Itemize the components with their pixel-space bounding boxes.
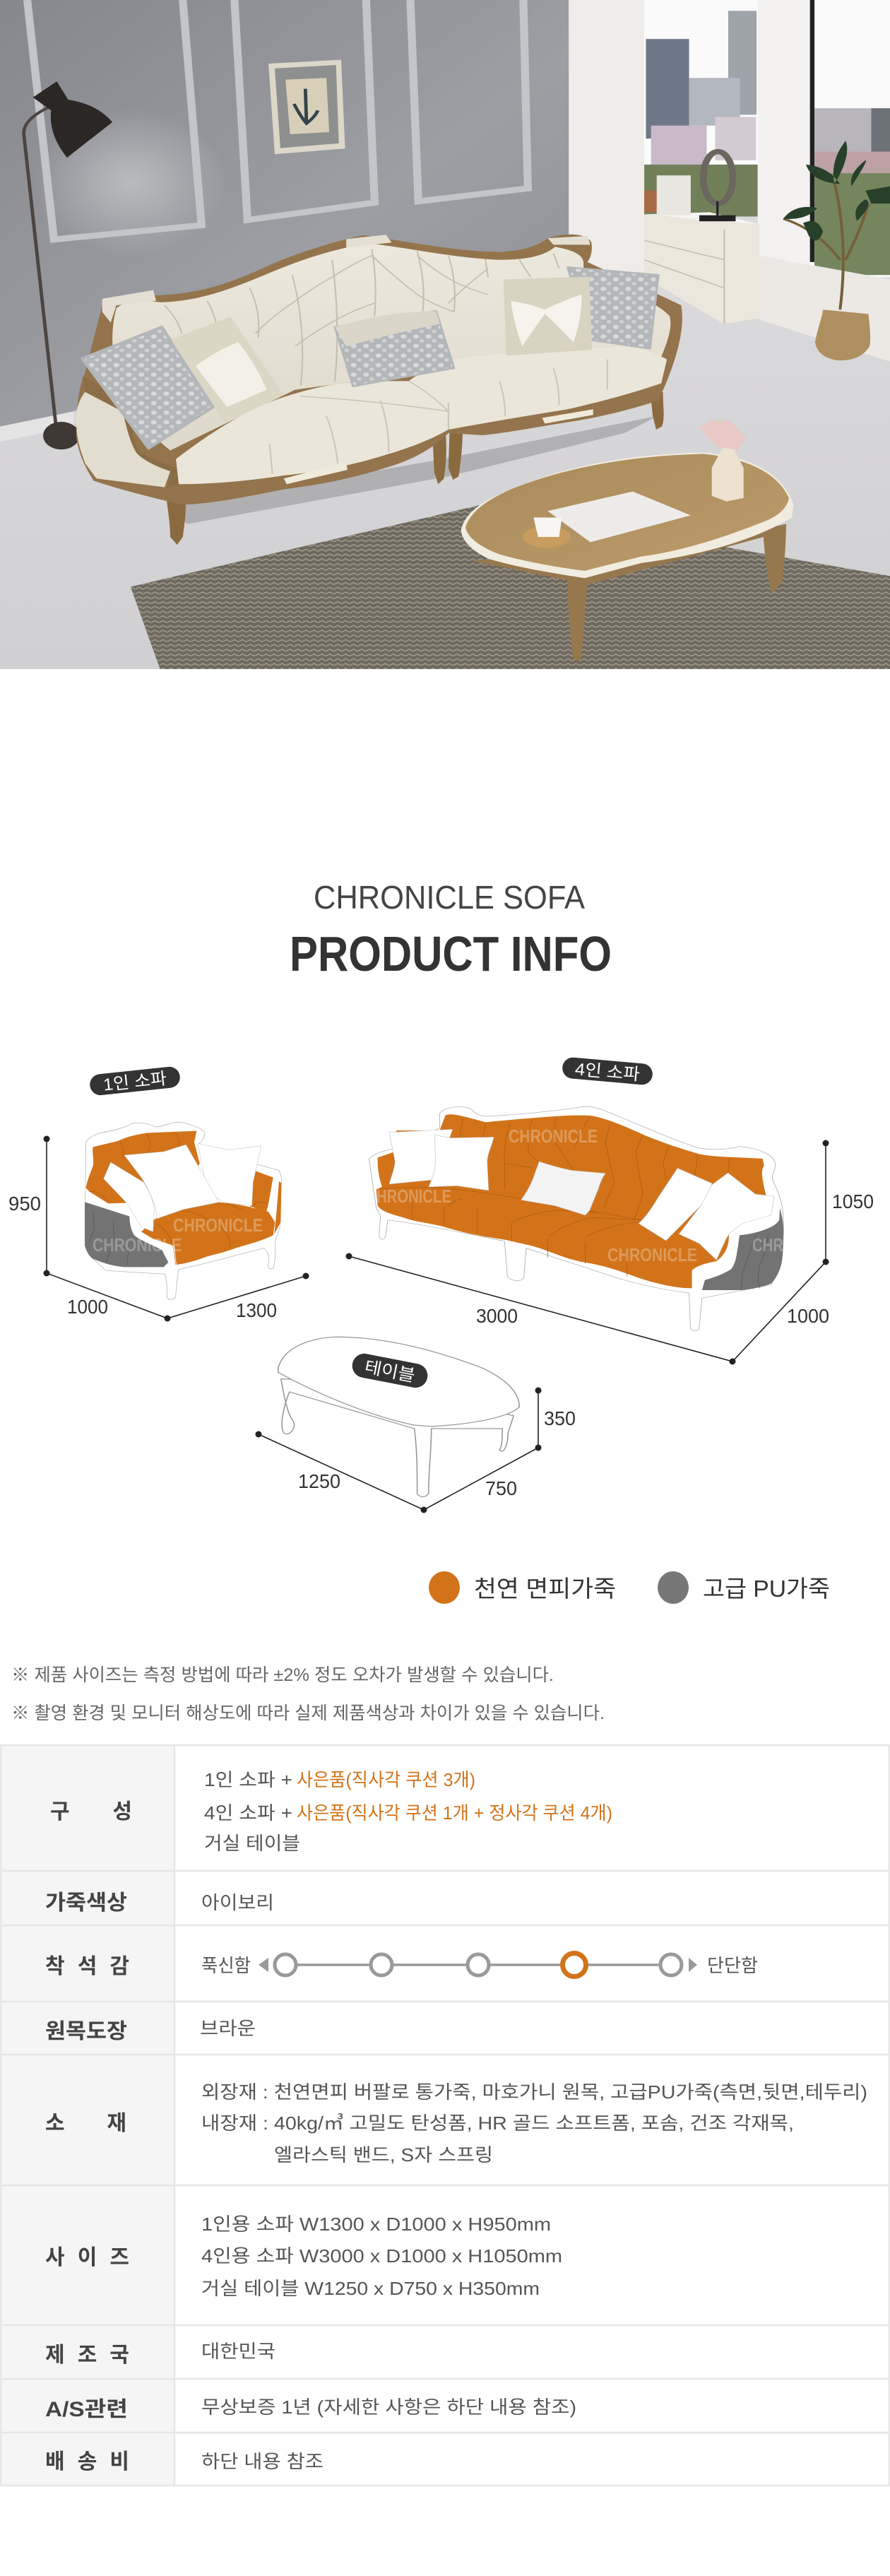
- wood silhouette: [76, 235, 682, 504]
- legend: PU leather: 고급 PU가죽: [703, 1576, 830, 1602]
- sofa frame: [369, 1106, 783, 1331]
- watermarks on upholstery: CHRONICLE: [173, 1215, 263, 1236]
- books and ring sculpture: [657, 152, 735, 221]
- row: 제조국: 대한민국: [201, 2341, 275, 2362]
- four-seat sofa drawing: [369, 1106, 784, 1331]
- sofa grey side: [702, 1208, 783, 1290]
- row: 소재: 내장재 : 40kg/㎥ 고밀도 탄성폼, HR 골드 소프트폼, 포솜, 건조 각재목,: [201, 2113, 794, 2134]
- watermarks on upholstery: CHR: [752, 1234, 783, 1255]
- row: 사이즈: 사 이 즈: [45, 2246, 129, 2269]
- row: 소재: [45, 2081, 867, 2166]
- row: 제조국: 제 조 국: [45, 2344, 129, 2367]
- table drawing: [277, 1337, 520, 1498]
- seat cushions: [176, 346, 667, 484]
- dimension numbers: 3000: [476, 1305, 518, 1327]
- cushion: paisley left: [83, 327, 213, 448]
- right lower wall: [759, 256, 890, 362]
- chair right arm: [249, 1171, 273, 1213]
- row: 구성: 사은품(직사각 쿠션 1개 + 정사각 쿠션 4개): [297, 1802, 612, 1824]
- coffee table: [461, 420, 793, 663]
- tag: 테이블: [350, 1352, 429, 1390]
- row: 제조국: [45, 2341, 275, 2367]
- spec table: [0, 1745, 890, 2486]
- skirting board: [0, 411, 73, 442]
- rug: [131, 504, 890, 669]
- sofa cushions: [389, 1129, 453, 1184]
- sofa tufting lines: [379, 1118, 730, 1277]
- tag: 4인 소파: [562, 1056, 653, 1086]
- dimension numbers: 1250: [298, 1470, 340, 1492]
- row: 배송비: 배 송 비: [45, 2450, 129, 2474]
- chair back: [86, 1131, 200, 1203]
- subtitle: CHRONICLE SOFA: CHRONICLE SOFA: [314, 879, 585, 916]
- row: 사이즈: 4인용 소파 W3000 x D1000 x H1050mm: [201, 2245, 562, 2267]
- white wall beside window: [569, 0, 644, 277]
- dimension numbers: 1000: [787, 1305, 829, 1327]
- cushion: beige bow left: [173, 319, 281, 421]
- sofa legs: [166, 392, 664, 545]
- tag: 1인 소파: 1인 소파: [102, 1069, 167, 1095]
- dimension numbers: 750: [485, 1477, 517, 1499]
- row: 구성: 구 성: [50, 1800, 132, 1824]
- row: 배송비: 하단 내용 참조: [201, 2451, 324, 2472]
- potted plant: [783, 141, 890, 360]
- chair grey side: [85, 1203, 168, 1267]
- framed botanical print: [268, 60, 345, 154]
- row: 사이즈: 1인용 소파 W1300 x D1000 x H950mm: [201, 2214, 551, 2235]
- watermarks on upholstery: CHRONICLE: [93, 1234, 182, 1255]
- skirt carving: [284, 409, 593, 484]
- legend: natural leather: 천연 면피가죽: [474, 1576, 616, 1602]
- row: 소재: 외장재 : 천연면피 버팔로 통가죽, 마호가니 원목, 고급PU가죽(측면,뒷면,테두리): [201, 2081, 867, 2103]
- firmness scale: [259, 1953, 697, 1977]
- chair frame: [85, 1122, 282, 1299]
- cushion: beige bow right: [505, 278, 591, 354]
- sofa: [76, 235, 682, 545]
- hero photo: living room with sofa and table: [0, 0, 890, 669]
- legend: PU leather: [658, 1571, 830, 1604]
- dimension numbers: [8, 1190, 874, 1499]
- row: 소재: 소 재: [45, 2112, 126, 2135]
- row: 구성: 사은품(직사각 쿠션 3개): [297, 1769, 475, 1790]
- dimension end dots: [44, 1136, 829, 1513]
- cushion: paisley right: [568, 267, 658, 348]
- white pillar: [758, 0, 810, 277]
- row: 가죽색상: 아이보리: [201, 1892, 274, 1913]
- row: 배송비: [45, 2450, 324, 2474]
- label column background: [0, 1745, 174, 2486]
- sofa back and seat upholstery: [376, 1114, 766, 1288]
- row: 원목도장: [45, 2018, 256, 2043]
- title: PRODUCT INFO: PRODUCT INFO: [290, 926, 612, 981]
- cup and saucer: [523, 526, 571, 548]
- row: A/S관련: A/S관련: [45, 2398, 128, 2421]
- row: 구성: 1인 소파 +: [204, 1769, 292, 1790]
- row: 사이즈: 거실 테이블 W1250 x D750 x H350mm: [201, 2278, 540, 2299]
- row: 원목도장: 브라운: [200, 2018, 256, 2039]
- row: 가죽색상: [45, 1891, 274, 1915]
- table top: [465, 454, 789, 571]
- row: 구성: [50, 1769, 612, 1854]
- dimension numbers: 350: [544, 1407, 576, 1429]
- left arm: [76, 392, 170, 488]
- row: A/S관련: [45, 2397, 576, 2421]
- watermarks on upholstery: [93, 1125, 783, 1265]
- row: 소재: 엘라스틱 밴드, S자 스프링: [274, 2144, 493, 2166]
- carved crown: [102, 235, 591, 323]
- tag: 1인 소파: [89, 1065, 181, 1097]
- row: A/S관련: 무상보증 1년 (자세한 사항은 하단 내용 참조): [201, 2397, 576, 2418]
- note 1: ※ 제품 사이즈는 측정 방법에 따라 ±2% 정도 오차가 발생할 수 있습니다.: [11, 1665, 554, 1685]
- dimension numbers: 1050: [832, 1190, 874, 1212]
- grey wall: [0, 0, 588, 427]
- row: 원목도장: 원목도장: [45, 2020, 127, 2043]
- watermarks on upholstery: CHRONICLE: [509, 1125, 598, 1147]
- row: 착석감 with firmness slider: [45, 1953, 758, 1978]
- row: 착석감 with firmness slider: 단단함: [707, 1955, 758, 1976]
- floor: [0, 216, 890, 669]
- chair seat: [141, 1203, 275, 1265]
- tag: 4인 소파: 4인 소파: [574, 1060, 641, 1085]
- back leather: [112, 243, 670, 450]
- row: 착석감 with firmness slider: 푹신함: [201, 1955, 251, 1976]
- chair cushions: [104, 1162, 154, 1231]
- dimension lines: [47, 1139, 826, 1510]
- watermarks on upholstery: HRONICLE: [376, 1186, 451, 1207]
- cushion: lumbar centre: [335, 311, 454, 386]
- row: 가죽색상: 가죽색상: [45, 1891, 127, 1915]
- vase with flowers: [712, 448, 744, 502]
- one-seat sofa drawing: [85, 1122, 282, 1300]
- sofa shadow: [170, 415, 658, 524]
- watermarks on upholstery: CHRONICLE: [607, 1244, 697, 1265]
- table rules: [0, 1745, 890, 2486]
- right window with city: [810, 0, 890, 277]
- dimension numbers: 950: [8, 1193, 41, 1215]
- white cabinet: [644, 212, 759, 324]
- dimension numbers: 1000: [67, 1296, 108, 1318]
- row: 착석감 with firmness slider: 착 석 감: [45, 1955, 129, 1978]
- dimension numbers: 1300: [236, 1299, 277, 1321]
- seat seams: [270, 360, 607, 474]
- left window with city: [644, 0, 758, 216]
- legend: natural leather: [429, 1571, 616, 1604]
- tag: 테이블: 테이블: [363, 1357, 417, 1386]
- tufting on the back: [165, 249, 559, 386]
- wall mouldings: [28, 0, 528, 240]
- floor lamp: [24, 81, 112, 449]
- note 2: ※ 촬영 환경 및 모니터 해상도에 따라 실제 제품색상과 차이가 있을 수 있습니다.: [11, 1703, 605, 1723]
- lamp glow on wall: [34, 108, 227, 256]
- row: 사이즈: [45, 2214, 562, 2299]
- row: 구성: 4인 소파 +: [204, 1802, 292, 1824]
- row: 구성: 거실 테이블: [204, 1833, 300, 1854]
- magazine: [547, 492, 691, 542]
